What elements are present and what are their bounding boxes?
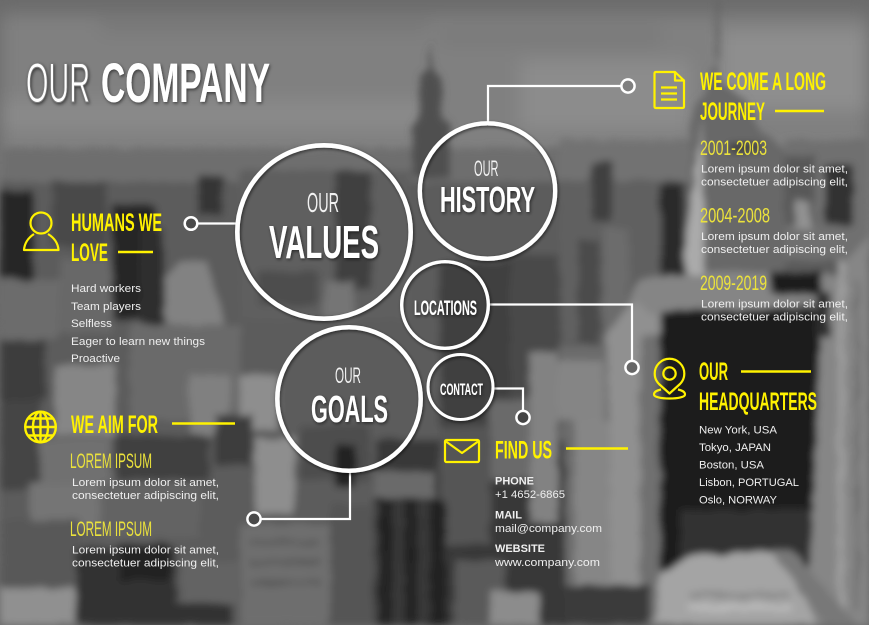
panel: we come a long journey	[700, 68, 848, 324]
panel: find us: PHONE	[495, 476, 534, 488]
panel: we aim for: WE AIM FOR	[71, 411, 158, 439]
panel: we come a long journey: 2009-2019	[700, 272, 767, 295]
circle: our goals: GOALS	[311, 389, 388, 431]
circle: our goals	[277, 327, 421, 471]
panel: we come a long journey: consectetuer adipiscing elit,	[701, 244, 848, 256]
panel: we come a long journey: Lorem ipsum dolor sit amet,	[701, 231, 848, 243]
panel: we aim for: consectetuer adipiscing elit,	[72, 490, 219, 502]
connector: locations to headquarters	[488, 304, 639, 374]
icon: globe	[25, 412, 56, 442]
icon: envelope	[445, 440, 479, 462]
panel: our headquarters: Tokyo, JAPAN	[699, 442, 771, 454]
circle: contact	[428, 354, 493, 420]
panel: our headquarters: Lisbon, PORTUGAL	[699, 477, 799, 489]
connector: contact to find us	[493, 388, 530, 424]
dark right skyscraper	[628, 270, 835, 322]
bottom left	[30, 483, 100, 528]
circle: contact: CONTACT	[440, 381, 483, 399]
panel: we come a long journey: consectetuer adipiscing elit,	[701, 176, 848, 188]
panel: humans we love: LOVE	[71, 239, 108, 267]
bottom right low building	[655, 552, 815, 625]
horizon band	[0, 148, 600, 182]
circle: our goals: OUR	[335, 363, 361, 388]
panel: we aim for: consectetuer adipiscing elit,	[72, 558, 219, 570]
panel: we aim for	[70, 411, 235, 570]
title	[26, 51, 270, 114]
panel: humans we love: Proactive	[71, 353, 120, 365]
city mass	[0, 150, 869, 625]
panel: we come a long journey: consectetuer adipiscing elit,	[701, 312, 848, 324]
panel: we come a long journey: 2001-2003	[700, 137, 767, 160]
panel: our headquarters: Boston, USA	[699, 460, 765, 472]
icon: document	[654, 72, 684, 108]
panel: humans we love: Selfless	[71, 318, 113, 330]
panel: humans we love: Eager to learn new things	[71, 336, 206, 348]
circle: our values: VALUES	[269, 216, 379, 268]
panel: we come a long journey: JOURNEY	[700, 98, 765, 126]
panel: we come a long journey: 2004-2008	[700, 204, 770, 228]
middle band	[0, 400, 40, 490]
icon: location pin	[654, 359, 685, 398]
circle: locations: LOCATIONS	[414, 297, 477, 320]
panel: find us	[494, 436, 628, 569]
far tower right	[715, 0, 719, 60]
connector: goals to we aim for	[247, 471, 350, 526]
panel: find us: +1 4652-6865	[495, 489, 565, 501]
title: COMPANY	[101, 51, 270, 114]
panel: humans we love: HUMANS WE	[71, 209, 162, 237]
panel: our headquarters	[699, 358, 817, 506]
circle: our history	[420, 123, 555, 259]
title: OUR	[26, 51, 90, 114]
circle: our history: OUR	[474, 156, 498, 181]
panel: find us: WEBSITE	[495, 543, 545, 555]
panel: find us: www.company.com	[494, 557, 600, 569]
panel: humans we love: Hard workers	[71, 283, 142, 295]
connector: history to journey	[488, 79, 635, 124]
centre bottom	[560, 345, 608, 625]
panel: our headquarters: Oslo, NORWAY	[699, 494, 778, 506]
panel: humans we love	[71, 209, 206, 365]
panel: our headquarters: New York, USA	[699, 424, 778, 436]
panel: we aim for: Lorem ipsum dolor sit amet,	[72, 477, 219, 489]
panel: humans we love: Team players	[71, 301, 142, 313]
panel: we aim for: Lorem ipsum dolor sit amet,	[72, 544, 219, 556]
panel: find us: MAIL	[495, 510, 522, 522]
panel: we aim for: LOREM IPSUM	[70, 518, 152, 541]
panel: find us: mail@company.com	[495, 523, 602, 535]
circle: our values: OUR	[307, 187, 339, 218]
empire state	[412, 42, 450, 178]
panel: we aim for: LOREM IPSUM	[70, 450, 152, 473]
circle: locations	[402, 262, 488, 348]
connector: values to humans	[185, 217, 237, 230]
circle: our history: HISTORY	[440, 179, 535, 220]
icon: person	[24, 212, 58, 250]
mid right buildings	[560, 180, 685, 340]
left dark towers	[0, 190, 34, 280]
right light building	[808, 235, 869, 625]
circle: our values	[237, 145, 411, 319]
panel: find us: FIND US	[495, 436, 552, 464]
panel: we come a long journey: Lorem ipsum dolor sit amet,	[701, 164, 848, 176]
panel: our headquarters: OUR	[699, 358, 728, 386]
panel: we come a long journey: Lorem ipsum dolor sit amet,	[701, 298, 848, 310]
